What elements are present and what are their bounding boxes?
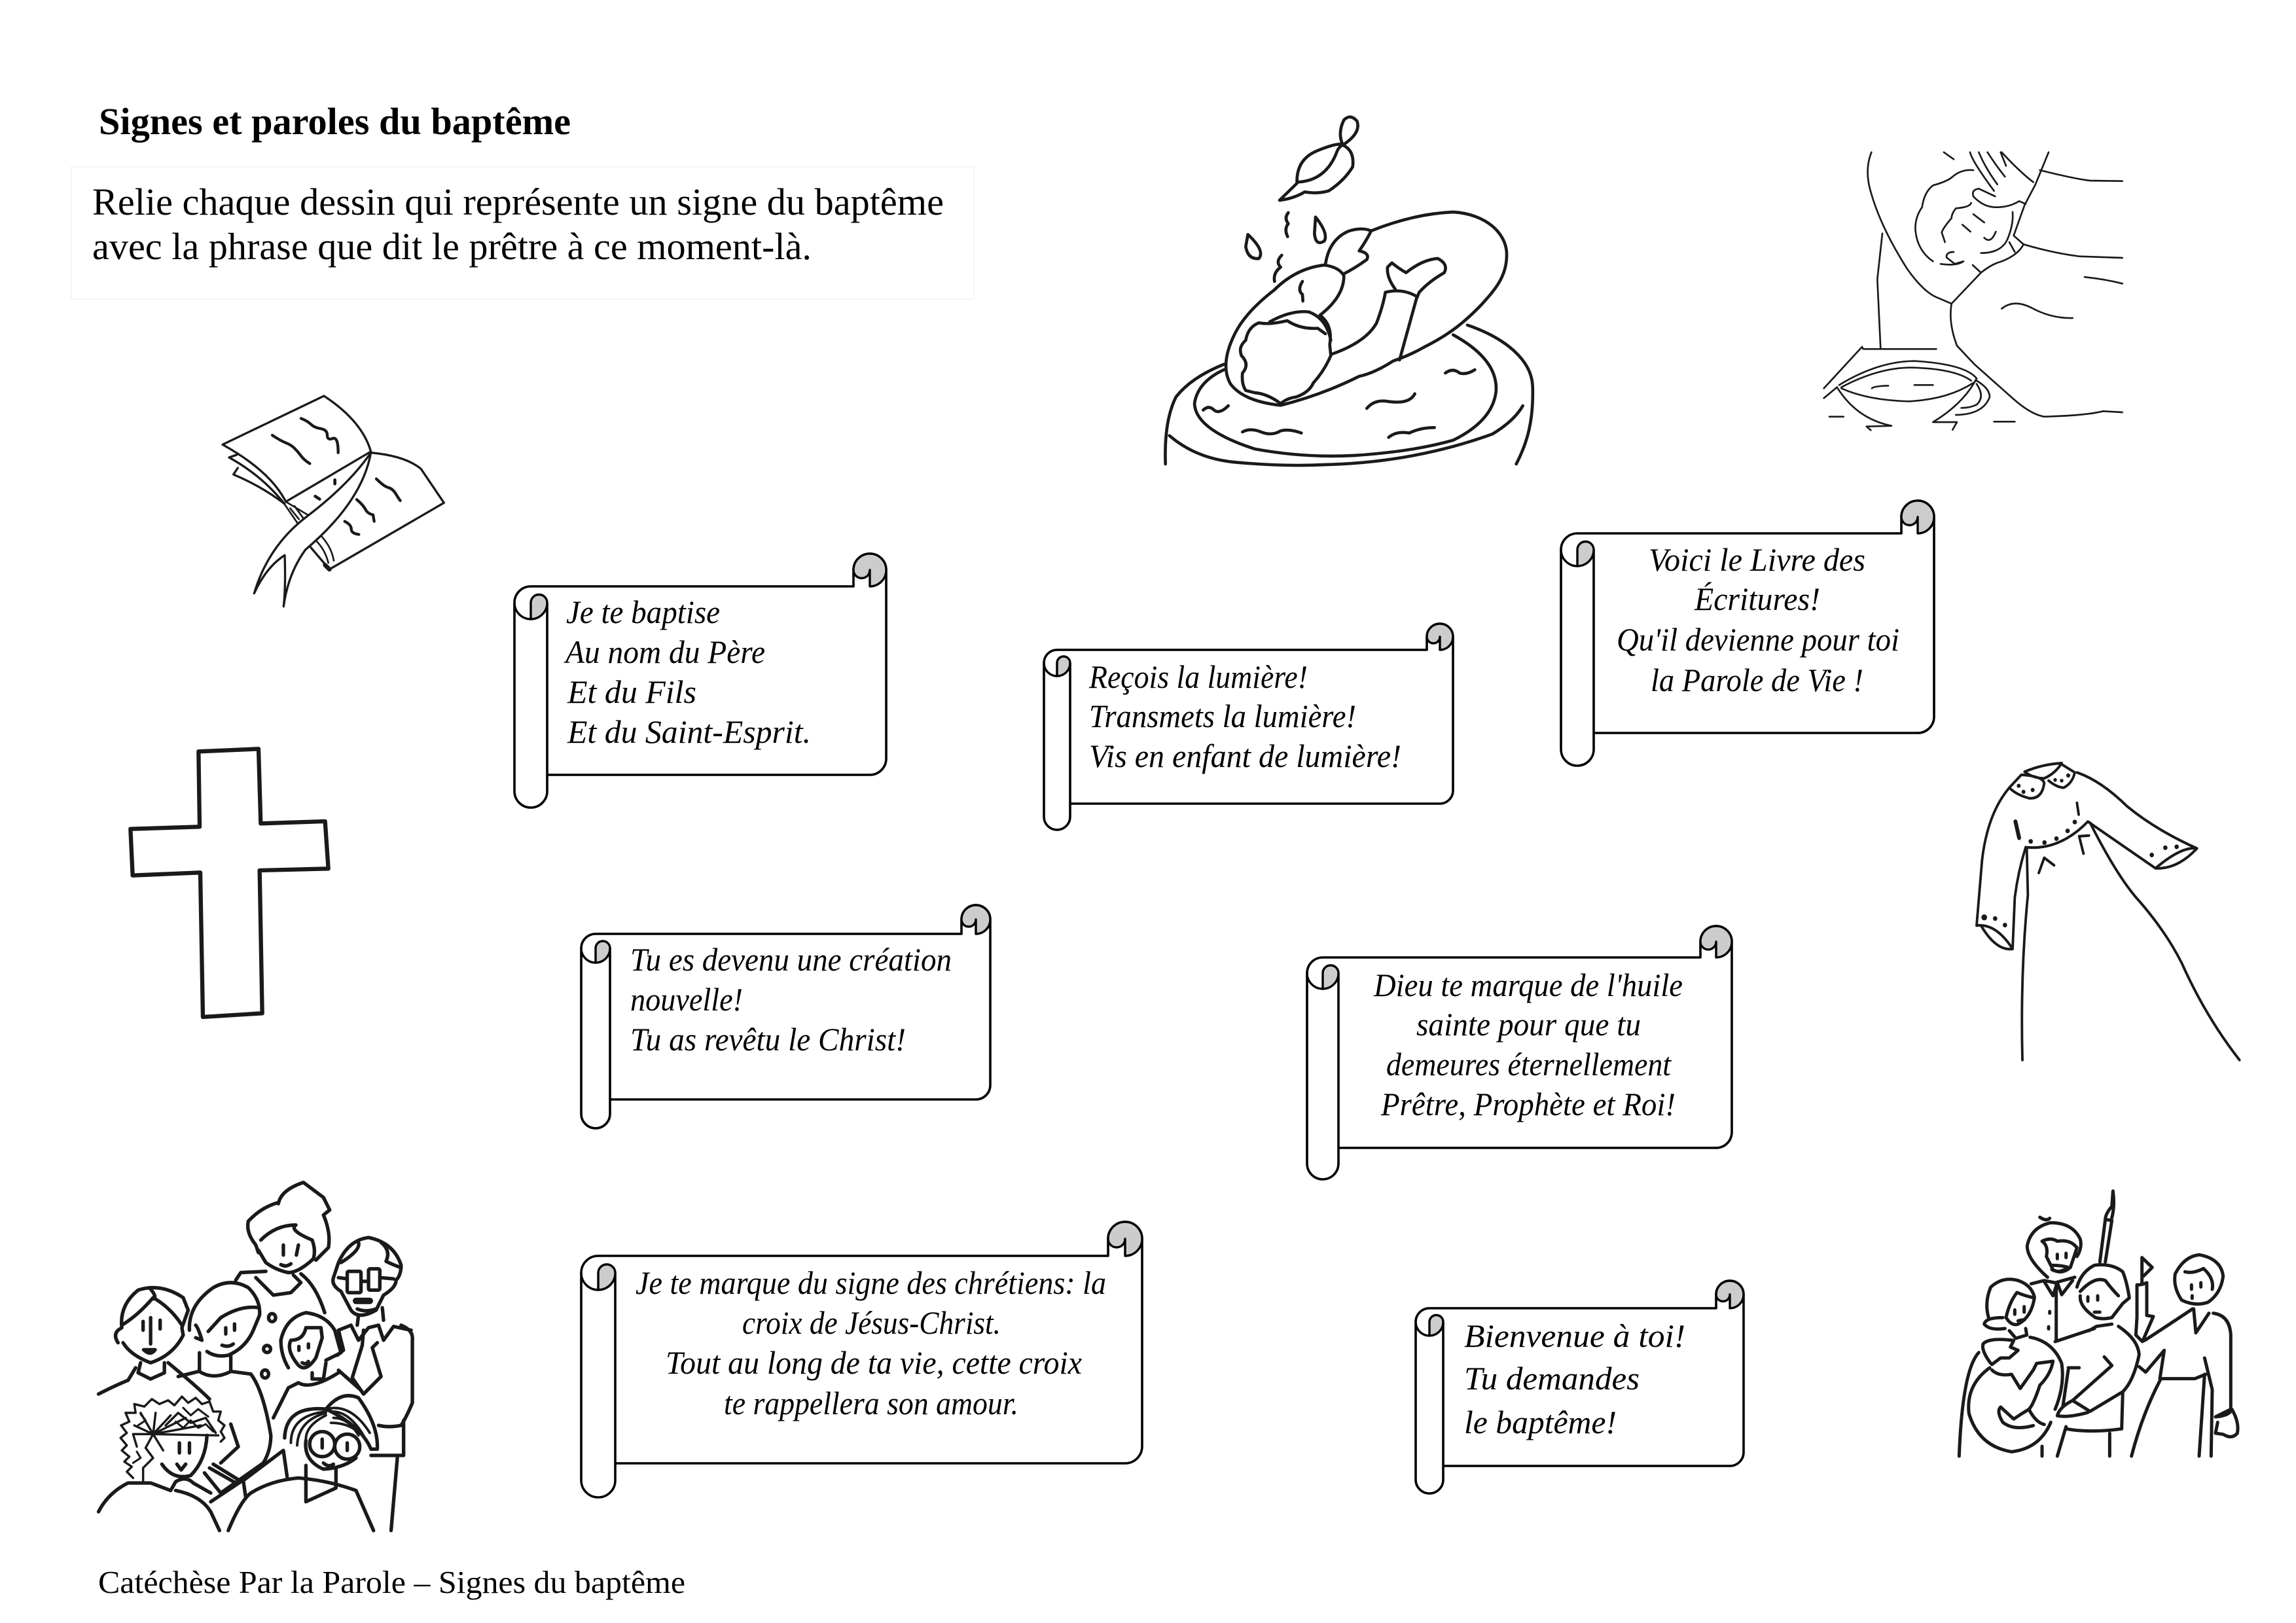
right man [2175, 1255, 2223, 1304]
title: Signes et paroles du baptême [99, 100, 571, 143]
middle boy [178, 1283, 271, 1493]
icon: family with candles [1959, 1191, 2238, 1456]
small candle [2136, 1258, 2153, 1342]
mother [1984, 1279, 2034, 1338]
scroll: Tu es devenu une création nouvelle: nouvelle! [630, 981, 743, 1018]
instruction box: avec la phrase que dit le prêtre à ce moment-là. [92, 225, 812, 268]
scroll: Bienvenue à toi [1416, 1281, 1744, 1493]
scroll: Voici le Livre des Écritures: Écritures! [1694, 580, 1820, 617]
icon: baptism by immersion [1165, 117, 1533, 465]
scroll: Dieu te marque de l'huile sainte: Prêtre, Prophète et Roi! [1380, 1086, 1676, 1122]
instruction box [71, 167, 974, 299]
scroll: Reçois la lumière: Transmets la lumière! [1089, 698, 1356, 734]
scroll: Reçois la lumière [1044, 624, 1453, 830]
scroll: Bienvenue à toi: Tu demandes [1464, 1360, 1640, 1397]
scroll: Tu es devenu une création nouvelle: Tu as revêtu le Christ! [630, 1021, 906, 1058]
scroll: Je te marque du signe des chrétiens: croix de Jésus-Christ. [742, 1304, 1001, 1341]
scroll: Je te marque du signe des chrétiens: te rappellera son amour. [724, 1385, 1018, 1421]
scroll: Tu es devenu une création nouvelle: Tu es devenu une création [630, 941, 952, 978]
tall candle [2100, 1191, 2114, 1262]
scroll: Je te baptise: Au nom du Père [564, 633, 765, 670]
icon: anointing with oil [1824, 152, 2123, 430]
dove [1280, 117, 1358, 200]
scroll: Voici le Livre des Écritures: la Parole de Vie ! [1651, 662, 1863, 698]
scroll: Dieu te marque de l'huile sainte: sainte pour que tu [1416, 1006, 1641, 1043]
scroll: Voici le Livre des Écritures: Qu'il devienne pour toi [1617, 621, 1899, 658]
scroll: Reçois la lumière: Vis en enfant de lumière! [1089, 738, 1401, 774]
scroll: Bienvenue à toi: Bienvenue à toi! [1464, 1317, 1685, 1354]
footer: Catéchèse Par la Parole – Signes du baptême [98, 1564, 685, 1600]
scroll: Dieu te marque de l'huile sainte [1307, 926, 1732, 1179]
font [1165, 325, 1533, 464]
left man [99, 1288, 209, 1399]
icon: group of people [99, 1183, 412, 1531]
water drops [1246, 213, 1325, 301]
scroll: Voici le Livre des Écritures [1561, 501, 1934, 766]
icon: open book with ribbon [223, 396, 444, 607]
child body halo [1226, 212, 1507, 405]
scroll: Dieu te marque de l'huile sainte: Dieu te marque de l'huile [1373, 967, 1683, 1003]
scroll: Je te marque du signe des chrétiens [581, 1222, 1142, 1497]
scroll: Reçois la lumière: Reçois la lumière! [1088, 658, 1308, 695]
godfather [2055, 1265, 2129, 1342]
scroll: Bienvenue à toi: le baptême! [1464, 1404, 1617, 1440]
icon: baptismal gown [1977, 763, 2240, 1060]
baby [1992, 1361, 2053, 1428]
scroll: Je te baptise [514, 554, 886, 808]
scroll: Tu es devenu une création nouvelle [581, 905, 990, 1128]
scroll: Je te marque du signe des chrétiens: Tout au long de ta vie, cette croix [666, 1344, 1082, 1381]
scroll: Je te baptise: Et du Fils [567, 673, 696, 710]
scroll: Je te baptise: Je te baptise [566, 594, 720, 630]
girl with round glasses [228, 1396, 378, 1531]
icon: cross [130, 749, 329, 1017]
man with glasses [333, 1238, 412, 1531]
scroll: Voici le Livre des Écritures: Voici le Livre des [1649, 541, 1865, 578]
top woman [236, 1183, 330, 1378]
instruction box: Relie chaque dessin qui représente un signe du baptême [92, 181, 944, 223]
scroll: Dieu te marque de l'huile sainte: demeures éternellement [1386, 1046, 1672, 1082]
father [2027, 1217, 2081, 1277]
small girl [274, 1313, 361, 1418]
scroll: Je te marque du signe des chrétiens: Je te marque du signe des chrétiens: la [636, 1264, 1106, 1301]
curly girl [99, 1397, 241, 1531]
scroll: Je te baptise: Et du Saint-Esprit. [567, 713, 811, 750]
